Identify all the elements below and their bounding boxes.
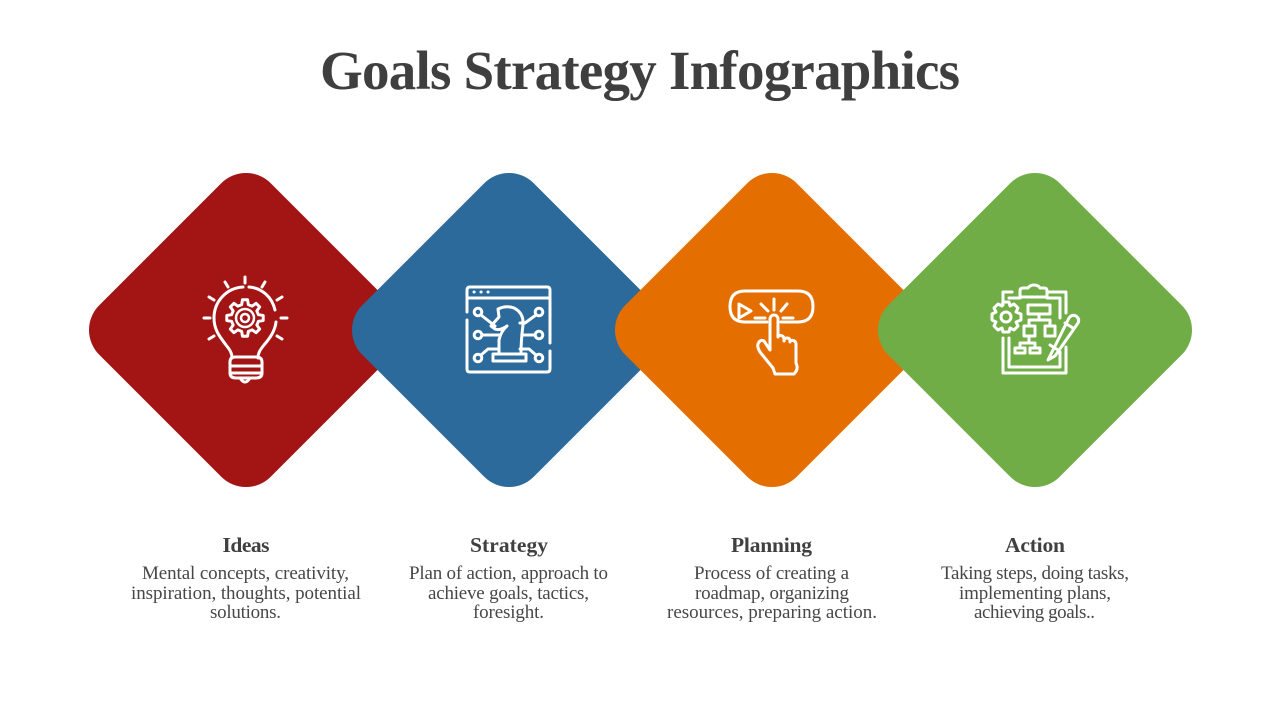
text block: planning: Process of creating a <box>694 563 850 584</box>
panel: action diamond <box>913 208 1157 452</box>
text block: action: Taking steps, doing tasks, <box>941 563 1129 584</box>
text block: planning: Planning <box>731 533 812 557</box>
panel: planning diamond <box>650 208 894 452</box>
icon: clipboard with gear, flowchart and pencil <box>992 285 1079 373</box>
icon: light bulb with gear <box>204 277 287 382</box>
text block: ideas: Ideas <box>222 533 270 557</box>
text block: action: achieving goals.. <box>974 602 1095 623</box>
icon: hand pressing play button <box>730 291 813 374</box>
text block: strategy: Strategy <box>470 533 548 557</box>
text block: planning: roadmap, organizing <box>695 583 850 604</box>
text block: ideas: Mental concepts, creativity, <box>142 563 349 584</box>
text block: action <box>941 533 1129 623</box>
text block: action: Action <box>1005 533 1065 557</box>
text block: ideas <box>131 533 361 623</box>
panel: strategy diamond <box>387 208 631 452</box>
text block: strategy: achieve goals, tactics, <box>428 583 589 604</box>
text block: strategy: Plan of action, approach to <box>409 563 608 584</box>
text block: ideas: solutions. <box>210 602 281 623</box>
title: Goals Strategy Infographics <box>320 40 960 101</box>
panel: ideas diamond <box>124 208 368 452</box>
text block: ideas: inspiration, thoughts, potential <box>131 583 361 604</box>
text block: strategy: foresight. <box>473 602 544 623</box>
text block: planning: resources, preparing action. <box>667 602 877 623</box>
text block: action: implementing plans, <box>959 583 1111 604</box>
text block: planning <box>667 533 877 623</box>
text block: strategy <box>409 533 608 623</box>
icon: chess knight on circuit window <box>467 287 550 372</box>
